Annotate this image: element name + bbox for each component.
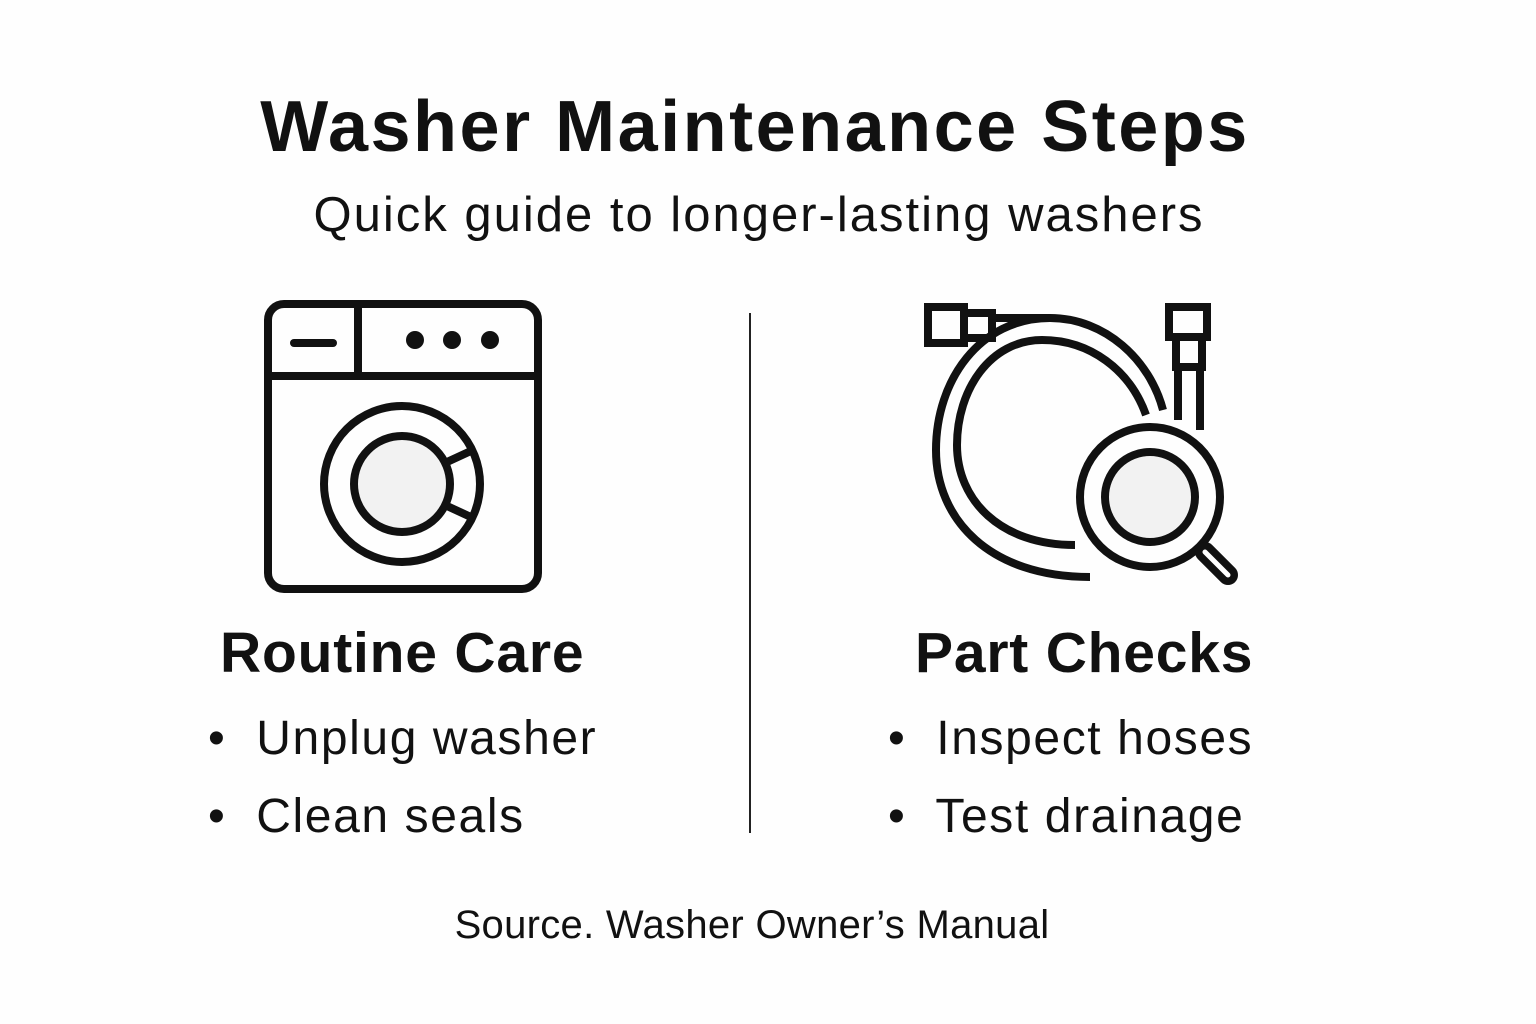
heading: Routine Care: Routine Care [220,621,584,685]
list: routine care: • Clean seals [208,790,525,843]
source: Source. Washer Owner’s Manual [455,903,1049,947]
list: part checks: • Test drainage [888,790,1244,843]
heading: Part Checks: Part Checks [915,621,1253,685]
list: part checks: • Inspect hoses [888,712,1253,765]
list: routine care: • Unplug washer [208,712,597,765]
list: routine care [208,712,597,843]
list: part checks [888,712,1253,843]
title: Washer Maintenance Steps [260,87,1250,167]
divider [749,313,751,833]
subtitle: Quick guide to longer-lasting washers [313,188,1205,242]
